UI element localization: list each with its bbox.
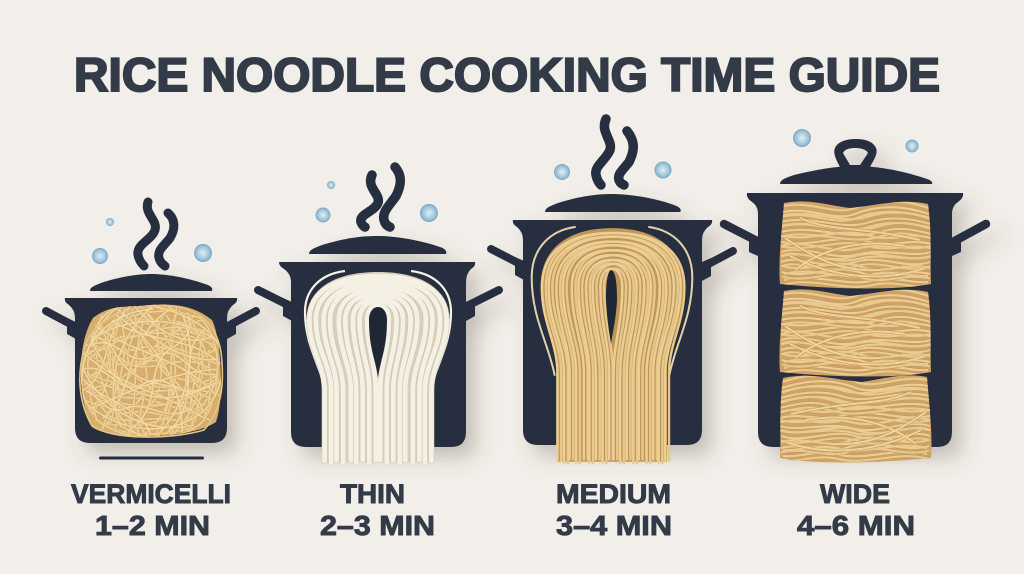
label: vermicelli: VERMICELLI [71,479,231,509]
noodles: thin white [305,271,451,463]
label: wide: WIDE [820,479,890,509]
panel: medium [491,119,733,541]
label: thin [320,479,435,541]
noodles: medium [532,227,692,463]
icon: pot with lid [46,274,256,443]
label: thin: 2–3 MIN [320,510,435,541]
noodles: vermicelli nest [79,304,224,438]
label: vermicelli: 1–2 MIN [95,510,210,541]
icon: steam [138,202,174,266]
title: RICE NOODLE COOKING TIME GUIDE [74,48,940,101]
label: medium: MEDIUM [556,479,671,509]
label: medium [556,479,672,541]
icon: water drops [793,129,918,152]
panel: wide [724,129,986,541]
icon: water drops [554,162,672,180]
label: thin: THIN [340,479,405,509]
icon: pot with lid [491,194,733,445]
label: vermicelli [71,479,231,541]
panel: vermicelli [46,202,256,541]
panel: thin [258,167,499,541]
noodles: wide middle nest [775,283,935,383]
label: wide: 4–6 MIN [797,510,915,541]
icon: pot with lid [724,139,986,447]
icon: pot with lid [258,236,499,447]
icon: water drops [92,218,212,264]
icon: water drops [316,181,438,222]
icon: steam [596,119,633,185]
label: wide [797,479,915,541]
noodles: wide bottom nest [776,369,936,469]
noodles: wide top nest [775,195,935,295]
underline [99,456,204,460]
icon: steam [361,167,400,227]
label: medium: 3–4 MIN [556,510,672,541]
